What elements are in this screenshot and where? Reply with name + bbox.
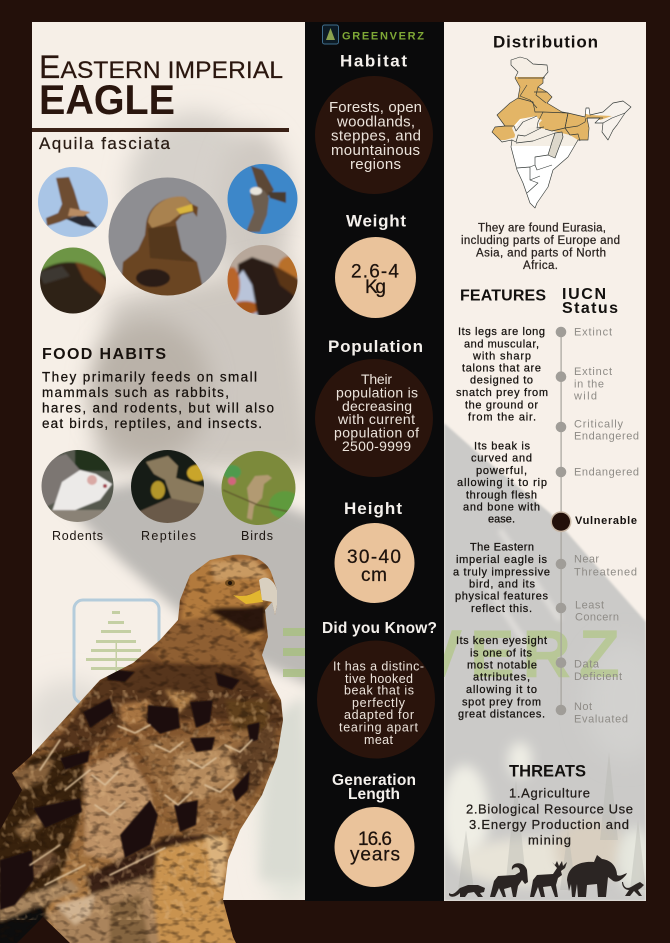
chart: iucn status timeline: Extinct — [574, 326, 612, 338]
fact: habitat: woodlands, — [336, 113, 415, 130]
fact: habitat: Habitat — [340, 52, 407, 71]
illustration: perched eagle — [0, 540, 295, 943]
chart: iucn status timeline: Concern — [575, 612, 619, 624]
chart: iucn status timeline: Extinct — [574, 366, 612, 378]
fact: weight: Weight — [346, 212, 406, 231]
photo: eagle head close-up on green — [40, 248, 106, 314]
icon: ibex — [490, 863, 528, 897]
text: food habits description: hares, and rodents, but will also — [42, 400, 274, 416]
photo: eagle head close-up on warm blur — [228, 245, 298, 315]
heading: iucn status: Status — [562, 300, 618, 317]
panel: centre facts column — [305, 22, 444, 901]
chart: iucn status timeline: wild — [573, 390, 597, 402]
fact: generation length: years — [350, 845, 400, 866]
feature: beak — [457, 440, 547, 526]
feature: legs: snatch prey from — [456, 387, 548, 399]
feature: legs: Its legs are long — [458, 326, 545, 338]
chart: iucn status timeline: Endangered — [574, 466, 639, 478]
feature: legs: the ground or — [465, 399, 538, 411]
labels: prey names: Reptiles — [141, 529, 196, 543]
feature: overall: reflect this. — [471, 603, 532, 615]
text: threats list — [466, 785, 633, 848]
labels: prey names: Birds — [241, 529, 273, 543]
fact: did you know: It has a distinc- — [333, 660, 424, 674]
icon: wildlife silhouettes — [449, 855, 644, 897]
text: distribution description: Africa. — [523, 260, 558, 272]
chart: iucn status timeline — [550, 326, 639, 726]
beak and eye — [233, 590, 263, 604]
text: threats list: mining — [528, 833, 571, 848]
fact: height: cm — [361, 565, 387, 586]
fact: did you know: tive hooked — [345, 672, 413, 686]
fact: height: Height — [344, 499, 402, 518]
title — [39, 49, 283, 123]
fact: did you know — [317, 620, 437, 758]
text: features descriptions — [453, 326, 550, 721]
fact: generation length: Generation — [332, 772, 416, 789]
fact: habitat: steppes, and — [331, 128, 421, 145]
chart: iucn status timeline: Evaluated — [574, 714, 628, 726]
fact: population: population is — [336, 385, 418, 401]
feature: beak: curved and — [471, 453, 532, 465]
icon: monkey — [622, 882, 644, 896]
chart: iucn status timeline: Vulnerable — [575, 515, 637, 527]
feature: legs: and muscular, — [464, 338, 539, 350]
photo: reptiles — [131, 450, 204, 523]
pale feather edges — [30, 725, 252, 885]
chart: iucn status timeline: Data — [574, 658, 600, 670]
icon: deer — [530, 861, 567, 897]
fact: population: decreasing — [342, 398, 412, 414]
feature: beak: through flesh — [466, 489, 537, 501]
fact: habitat: regions — [350, 156, 401, 173]
feature: eyesight — [456, 635, 547, 721]
logo: greenverz: GREENVERZ — [342, 30, 424, 42]
fact: population: Population — [328, 337, 423, 356]
logo: greenverz — [322, 25, 424, 44]
fact: did you know: tearing apart — [339, 721, 419, 735]
photo: birds — [222, 451, 296, 525]
text: food habits description: eat birds, reptiles, and insects. — [42, 416, 262, 431]
feature: overall: bird, and its — [469, 578, 536, 590]
feature: legs: with sharp — [472, 350, 531, 362]
text: food habits description — [42, 370, 274, 431]
fact: population: Their — [361, 371, 392, 387]
fact: generation length: 16.6 — [358, 829, 392, 850]
feature: beak: powerful, — [476, 465, 527, 477]
fact: height — [334, 499, 414, 603]
chart: iucn status timeline: Not — [574, 701, 592, 713]
panel: left species overview — [25, 22, 320, 910]
feature: eyesight: most notable — [467, 659, 537, 671]
fact: did you know: beak that is — [344, 684, 414, 698]
feature: legs: from the air. — [468, 411, 536, 423]
text: distribution description: They are found Eurasia, — [478, 222, 606, 234]
feature: eyesight: is one of its — [470, 647, 532, 659]
title: EASTERN IMPERIAL — [39, 49, 283, 85]
watermark: greenverz logo — [74, 600, 305, 703]
icon: elephant — [567, 855, 627, 897]
feature: beak: Its beak is — [474, 440, 530, 452]
chart: iucn status timeline: Near — [574, 554, 599, 566]
feature: overall: physical features — [455, 591, 548, 603]
feature: eyesight: Its keen eyesight — [456, 635, 547, 647]
text: threats list: 3.Energy Production and — [469, 817, 629, 832]
feature: overall: imperial eagle is — [456, 554, 548, 566]
text: threats list: 2.Biological Resource Use — [466, 801, 633, 816]
text: distribution description: Asia, and parts of North — [476, 248, 606, 260]
chart: iucn status timeline: Endangered — [574, 430, 639, 442]
photo: osprey against blue sky — [228, 164, 298, 234]
labels: prey names — [52, 529, 273, 543]
fact: did you know: Did you Know? — [322, 620, 437, 637]
text: food habits description: mammals such as rabbits, — [42, 385, 229, 400]
title underline — [32, 128, 289, 132]
feature: overall: a truly impressive — [453, 566, 550, 578]
feature: beak: ease. — [488, 514, 515, 526]
fact: did you know: meat — [364, 733, 394, 747]
fact: habitat — [315, 52, 433, 194]
feature: legs: talons that are — [462, 363, 541, 375]
feature: legs: designed to — [470, 375, 533, 387]
feature: overall — [453, 542, 550, 615]
text: distribution description: including parts of Europe and — [461, 235, 620, 247]
heading: distribution: Distribution — [493, 32, 598, 52]
chart: iucn status timeline: Least — [575, 599, 604, 611]
fact: did you know: perfectly — [352, 696, 406, 710]
fact: height: 30-40 — [347, 547, 401, 568]
chart: iucn status timeline: Threatened — [574, 566, 637, 578]
fact: did you know: adapted for — [344, 708, 414, 722]
feature: legs — [456, 326, 548, 423]
feature: eyesight: spot prey from — [462, 696, 541, 708]
fact: generation length — [332, 772, 416, 887]
fact: population: with current — [337, 411, 415, 427]
feature: eyesight: great distances. — [458, 709, 545, 721]
fact: population: 2500-9999 — [342, 438, 411, 454]
dark feather blotches — [0, 668, 260, 910]
chart: iucn status timeline: Critically — [574, 418, 624, 430]
feature: eyesight: allowing it to — [466, 684, 537, 696]
icon: leopard — [449, 885, 485, 897]
heading: food habits: FOOD HABITS — [42, 346, 166, 363]
text: food habits description: They primarily feeds on small — [42, 370, 257, 384]
feature: eyesight: attributes, — [473, 672, 530, 684]
fact: weight: 2.6-4 — [351, 262, 399, 282]
title: EAGLE — [39, 76, 175, 123]
map: india distribution — [488, 55, 635, 208]
fact: weight — [335, 212, 416, 318]
panel: right distribution, features and threats — [444, 22, 646, 901]
chart: iucn status timeline: in the — [574, 378, 604, 390]
chart: iucn status timeline: Deficient — [574, 671, 622, 683]
fact: habitat: mountainous — [331, 142, 420, 159]
feature: beak: and bone with — [463, 501, 540, 513]
watermark: greenverz wordmark: VERZ — [417, 616, 620, 692]
fact: population — [315, 337, 433, 477]
fact: population: population of — [334, 425, 419, 441]
scientific name: Aquila fasciata — [39, 134, 171, 153]
heading: features: FEATURES — [460, 288, 546, 304]
text: distribution description — [461, 222, 620, 272]
fact: habitat: Forests, open — [329, 99, 422, 116]
text: threats list: 1.Agriculture — [509, 785, 590, 800]
photo: eagle portrait, main circle — [106, 175, 230, 299]
photo: rodents — [42, 450, 114, 522]
photo: eagle in flight against pale sky — [38, 167, 108, 237]
fact: generation length: Length — [348, 786, 400, 803]
labels: prey names: Rodents — [52, 529, 103, 543]
feature: beak: allowing it to rip — [457, 477, 547, 489]
heading: iucn status: IUCN — [562, 286, 606, 303]
feature: overall: The Eastern — [470, 542, 534, 554]
heading: iucn status — [562, 286, 618, 317]
heading: threats: THREATS — [509, 763, 586, 781]
fact: weight: Kg — [365, 277, 386, 298]
